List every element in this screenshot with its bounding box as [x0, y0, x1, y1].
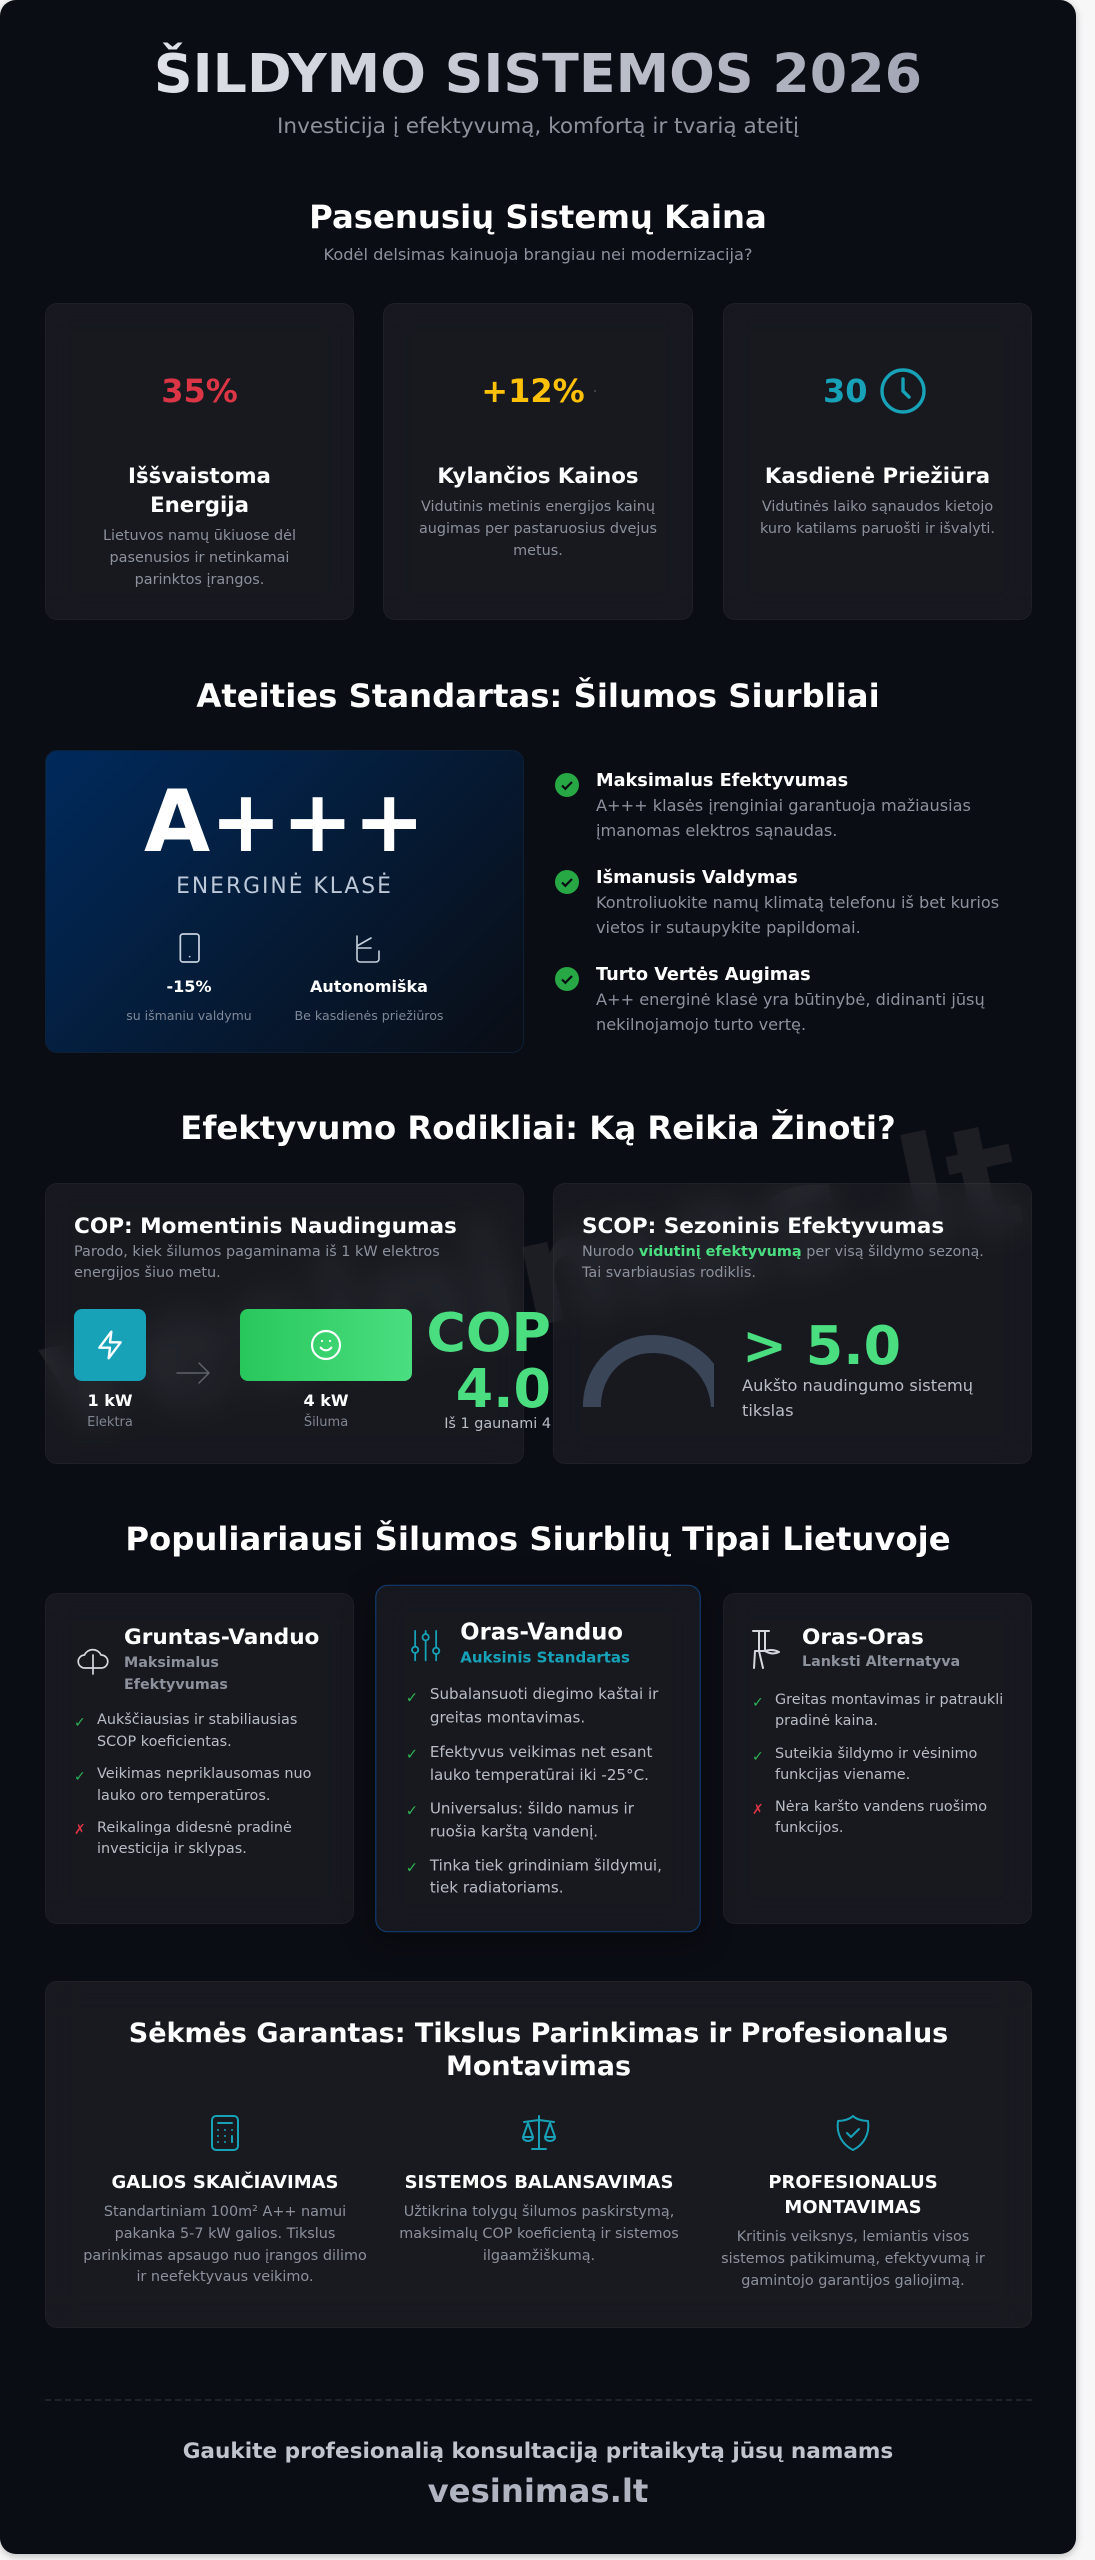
mark: ✓	[406, 1746, 418, 1763]
heading: efficiency metrics: Efektyvumo Rodikliai: Ką Reikia Žinoti?	[180, 1109, 896, 1147]
type subtitle: Efektyvumas	[124, 1677, 228, 1693]
item: pradinė kaina.	[775, 1713, 878, 1729]
item: ruošia karštą vandenį.	[430, 1824, 598, 1840]
icon: phone	[179, 933, 200, 963]
COP caption: Iš 1 gaunami 4	[444, 1416, 551, 1432]
panel text: energijos šiuo metu.	[74, 1265, 221, 1281]
panel: success guarantee	[45, 1981, 1032, 2328]
card text: metus.	[513, 543, 563, 559]
diagram: heat box	[240, 1309, 412, 1381]
icon: clock	[880, 368, 926, 414]
gauge arc	[583, 1335, 714, 1407]
column text	[388, 2202, 690, 2267]
heading: heat pump types: Populiariausi Šilumos Siurblių Tipai Lietuvoje	[125, 1520, 951, 1558]
footer divider	[45, 2399, 1032, 2401]
item: Aukščiausias ir stabiliausias	[97, 1712, 297, 1728]
icon: sliders	[411, 1630, 440, 1662]
heading: future standard: Ateities Standartas: Šilumos Siurbliai	[196, 677, 880, 715]
column text: gamintojo garantijos galiojimą.	[741, 2273, 965, 2289]
benefit title: Turto Vertės Augimas	[596, 965, 811, 985]
benefit title: Išmanusis Valdymas	[596, 868, 798, 888]
stat caption: su išmaniu valdymu	[126, 1008, 252, 1023]
energy class rating: A+++	[144, 773, 425, 872]
energy class label: ENERGINĖ KLASĖ	[176, 874, 393, 899]
icon: check	[555, 773, 579, 797]
column text: sistemos patikimumą, efektyvumą ir	[721, 2251, 985, 2267]
panel: SCOP	[553, 1183, 1032, 1464]
card title	[128, 464, 271, 518]
icon: smile	[310, 1330, 342, 1360]
column text	[74, 2202, 376, 2289]
column title: SISTEMOS BALANSAVIMAS	[405, 2172, 673, 2193]
column text: ilgaamžiškumą.	[483, 2248, 595, 2264]
column text: Kritinis veiksnys, lemiantis visos	[737, 2229, 969, 2245]
COP value	[426, 1301, 551, 1420]
card text	[419, 499, 657, 559]
benefit text: A++ energinė klasė yra būtinybė, didinanti jūsų	[596, 990, 985, 1009]
column title: GALIOS SKAIČIAVIMAS	[112, 2172, 338, 2193]
subtitle: Investicija į efektyvumą, komfortą ir tvarią ateitį	[277, 114, 799, 139]
mark: ✗	[74, 1822, 86, 1838]
item	[430, 1686, 658, 1726]
card text: parinktos įrangos.	[135, 572, 264, 588]
benefit text	[596, 893, 999, 937]
panel: daily maintenance	[723, 303, 1032, 620]
icon: check	[555, 870, 579, 894]
pros and cons	[74, 1712, 311, 1857]
icon: lightning	[98, 1330, 122, 1360]
column text: ir neefektyvaus veikimo.	[136, 2269, 314, 2285]
item	[430, 1857, 662, 1897]
benefit text: Kontroliuokite namų klimatą telefonu iš bet kurios	[596, 893, 999, 912]
card text: Vidutinės laiko sąnaudos kietojo	[762, 499, 993, 515]
panel: air-water highlighted	[375, 1585, 701, 1932]
benefit: maximum efficiency	[555, 771, 971, 840]
card text: Vidutinis metinis energijos kainų	[421, 499, 655, 515]
benefit: property value	[555, 965, 985, 1034]
item: lauko oro temperatūros.	[97, 1788, 270, 1804]
panel heading: Sėkmės Garantas: Tikslus Parinkimas ir Profesionalus	[129, 2018, 948, 2049]
mark: ✓	[752, 1748, 764, 1764]
panel text: Tai svarbiausias rodiklis.	[582, 1265, 756, 1281]
benefit title: Maksimalus Efektyvumas	[596, 771, 848, 791]
panel: ground-water	[45, 1593, 354, 1924]
item: Greitas montavimas ir patraukli	[775, 1692, 1003, 1708]
tiny dot	[594, 390, 596, 392]
column: sizing	[74, 2112, 376, 2302]
item	[97, 1820, 292, 1857]
caption: heat: Šiluma	[304, 1415, 348, 1430]
footer website: vesinimas.lt	[428, 2472, 648, 2510]
benefit text: nekilnojamojo turto vertę.	[596, 1015, 806, 1034]
card text: augimas per pastaruosius dvejus	[419, 521, 657, 537]
subheading: old systems: Kodėl delsimas kainuoja brangiau nei modernizacija?	[324, 245, 752, 264]
item: funkcijas viename.	[775, 1767, 910, 1783]
icon: scales	[521, 2115, 557, 2151]
stat caption: Be kasdienės priežiūros	[295, 1008, 443, 1023]
column: installation	[702, 2112, 1004, 2302]
mark: ✓	[406, 1860, 418, 1877]
column text	[702, 2227, 1004, 2292]
column title: PROFESIONALUS	[768, 2172, 938, 2193]
mark: ✓	[74, 1715, 86, 1731]
column title: MONTAVIMAS	[784, 2197, 922, 2218]
type subtitle: Auksinis Standartas	[460, 1650, 630, 1667]
item: lauko temperatūrai iki -25°C.	[430, 1767, 649, 1784]
stat: 35%: 35%	[161, 372, 238, 410]
SCOP caption: Aukšto naudingumo sistemų	[742, 1376, 973, 1395]
stat: 30: 30	[823, 372, 868, 410]
card text: pasenusios ir netinkamai	[110, 550, 289, 566]
label: 1 kW: 1 kW	[88, 1391, 132, 1410]
panel: air-air	[723, 1593, 1032, 1924]
item	[430, 1801, 634, 1840]
benefit: smart control	[555, 868, 999, 937]
title: ŠILDYMO SISTEMOS 2026	[154, 42, 922, 105]
diagram: electricity box	[74, 1309, 146, 1381]
item: investicija ir sklypas.	[97, 1841, 247, 1857]
card title: Iššvaistoma	[128, 464, 271, 489]
card text	[760, 499, 995, 537]
pros and cons	[752, 1692, 1003, 1836]
panel: rising prices	[383, 303, 693, 620]
caption: electricity: Elektra	[87, 1415, 133, 1430]
item: tiek radiatoriams.	[430, 1880, 564, 1897]
item	[775, 1744, 977, 1786]
panel heading: Montavimas	[446, 2051, 631, 2082]
type title: Oras-Oras	[802, 1625, 924, 1650]
type title: Oras-Vanduo	[460, 1619, 623, 1645]
mark: ✓	[74, 1769, 86, 1785]
panel: energy class	[45, 750, 524, 1053]
arrow	[176, 1362, 210, 1384]
benefit text: A+++ klasės įrenginiai garantuoja mažiausias	[596, 796, 971, 815]
icon: calculator	[207, 2115, 243, 2151]
item: Subalansuoti diegimo kaštai ir	[430, 1687, 658, 1703]
panel text	[582, 1244, 984, 1281]
card text: Lietuvos namų ūkiuose dėl	[103, 528, 296, 544]
item	[775, 1692, 1003, 1729]
stat: +12%: +12%	[481, 372, 585, 410]
icon: check	[555, 967, 579, 991]
COP value: 4.0	[456, 1357, 551, 1420]
card title: Kasdienė Priežiūra	[765, 464, 990, 489]
mark: ✓	[752, 1694, 764, 1710]
item: Reikalinga didesnė pradinė	[97, 1820, 292, 1836]
icon: cloud tree	[77, 1648, 109, 1675]
column title	[702, 2170, 1004, 2220]
icon: autonomous	[356, 935, 380, 963]
benefit text	[596, 796, 971, 840]
heading: old systems: Pasenusių Sistemų Kaina	[309, 198, 767, 236]
column text: Užtikrina tolygų šilumos paskirstymą,	[404, 2204, 674, 2220]
label: 4 kW: 4 kW	[304, 1391, 348, 1410]
SCOP caption: tikslas	[742, 1401, 794, 1420]
card title: Kylančios Kainos	[437, 464, 639, 489]
column text: Standartiniam 100m² A++ namui	[104, 2204, 346, 2220]
type subtitle	[124, 1655, 228, 1693]
card title: Energija	[150, 493, 249, 518]
type subtitle: Lanksti Alternatyva	[802, 1654, 960, 1670]
panel heading: SCOP: Sezoninis Efektyvumas	[582, 1214, 944, 1239]
item	[775, 1796, 987, 1840]
panel heading	[46, 2018, 1031, 2083]
item: Tinka tiek grindiniam šildymui,	[430, 1857, 662, 1874]
item	[97, 1766, 311, 1804]
benefit text	[596, 990, 985, 1034]
type title: Gruntas-Vanduo	[124, 1625, 319, 1650]
stat: minus 15 percent: -15%	[167, 977, 211, 996]
SCOP value: > 5.0	[742, 1314, 901, 1377]
stat: autonomous: Autonomiška	[310, 977, 428, 996]
mark: ✓	[406, 1690, 418, 1707]
panel text	[74, 1244, 440, 1281]
item: Efektyvus veikimas net esant	[430, 1744, 652, 1761]
item: Universalus: šildo namus ir	[430, 1801, 634, 1818]
pros list	[406, 1686, 662, 1897]
item: Nėra karšto vandens ruošimo	[775, 1798, 987, 1814]
item: funkcijos.	[775, 1820, 843, 1836]
title	[0, 39, 1076, 109]
card text: kuro katilams paruošti ir išvalyti.	[760, 521, 995, 537]
footer call to action: Gaukite profesionalią konsultaciją pritaikytą jūsų namams	[183, 2439, 893, 2464]
card text	[103, 528, 296, 588]
mark: ✓	[406, 1803, 418, 1820]
benefit text: įmanomas elektros sąnaudas.	[596, 821, 837, 840]
column text: parinkimas apsaugo nuo įrangos dilimo	[83, 2248, 367, 2264]
SCOP caption	[742, 1376, 973, 1420]
icon: shield check	[835, 2115, 871, 2151]
item	[97, 1712, 297, 1750]
panel text: Nurodo vidutinį efektyvumą per visą šildymo sezoną.	[582, 1244, 984, 1260]
item: SCOP koeficientas.	[97, 1734, 232, 1750]
watermark: vesinimas.lt	[24, 1089, 1036, 1463]
panel: COP	[45, 1183, 524, 1464]
panel: wasted energy	[45, 303, 354, 620]
panel text: Parodo, kiek šilumos pagaminama iš 1 kW elektros	[74, 1244, 440, 1260]
column text: pakanka 5-7 kW galios. Tikslus	[115, 2226, 335, 2242]
column: balancing	[388, 2112, 690, 2302]
panel heading: COP: Momentinis Naudingumas	[74, 1214, 457, 1239]
item: greitas montavimas.	[430, 1709, 585, 1726]
item: Veikimas nepriklausomas nuo	[97, 1766, 311, 1782]
benefit text: vietos ir sutaupykite papildomai.	[596, 918, 861, 937]
COP value: COP	[426, 1301, 551, 1364]
item: Suteikia šildymo ir vėsinimo	[775, 1746, 977, 1762]
mark: ✗	[752, 1802, 764, 1818]
type subtitle: Maksimalus	[124, 1655, 219, 1671]
item	[430, 1744, 652, 1784]
column text: maksimalų COP koeficientą ir sistemos	[399, 2226, 679, 2242]
icon: air unit	[752, 1630, 780, 1669]
